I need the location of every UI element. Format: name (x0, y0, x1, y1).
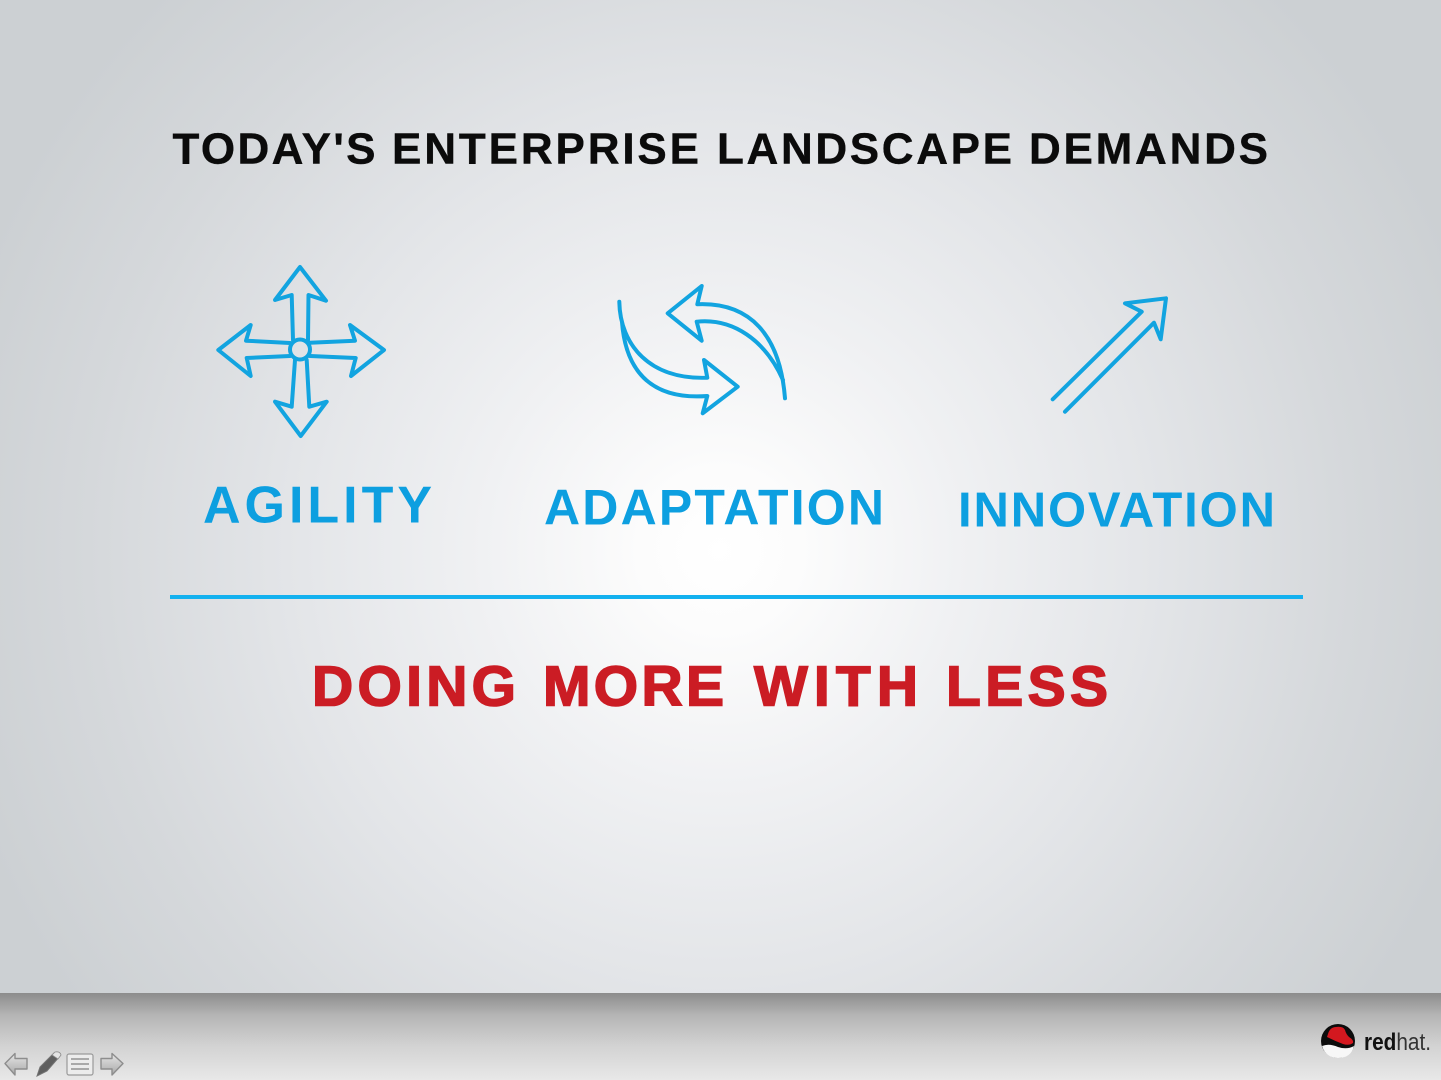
title: ENTERPRISE (392, 124, 699, 174)
label: agility: AGILITY (203, 476, 432, 534)
icon: previous arrow (5, 1054, 27, 1075)
logo: red hat (1321, 1024, 1431, 1058)
title (172, 124, 1268, 174)
icon: menu (67, 1054, 93, 1075)
icon: innovation diagonal arrow (1053, 298, 1166, 412)
tagline: DOING (312, 654, 516, 718)
logo emblem (1321, 1024, 1355, 1058)
icon: pen (37, 1052, 61, 1076)
divider line (170, 595, 1303, 599)
footer bar (0, 993, 1441, 1080)
title: LANDSCAPE (717, 124, 1012, 174)
title: DEMANDS (1029, 124, 1268, 174)
logo wordmark: redhat. (1364, 1029, 1431, 1056)
label: innovation: INNOVATION (958, 484, 1275, 538)
tagline: WITH (754, 654, 918, 718)
label: adaptation: ADAPTATION (544, 480, 884, 536)
icon: adaptation circular arrows (619, 286, 785, 413)
tagline (312, 654, 1108, 718)
icon: next arrow (101, 1054, 123, 1075)
tagline: LESS (946, 654, 1108, 718)
tagline: MORE (543, 654, 724, 718)
icon: agility four-way arrows (218, 267, 384, 436)
title: TODAY'S (172, 124, 376, 174)
